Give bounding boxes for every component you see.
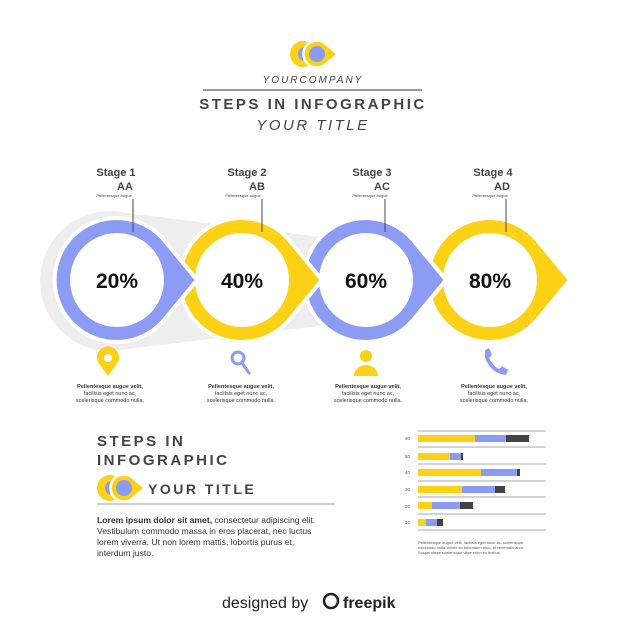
- stage descriptions: scelerisque commodo nulla.: [76, 398, 145, 404]
- icon: phone: [485, 348, 508, 375]
- stage labels: AC: [374, 181, 390, 193]
- paragraph: [97, 515, 315, 558]
- stage labels: AD: [494, 181, 510, 193]
- paragraph: lorem viverra. Ut non lorem mattis, lobortis purus et,: [97, 537, 294, 547]
- bar chart: [405, 431, 546, 530]
- stage labels: AA: [117, 181, 133, 193]
- stage descriptions: Pellentesque augue velit,: [335, 384, 401, 390]
- footer credit: freepik: [343, 595, 396, 612]
- stage 4: 80%: [469, 270, 511, 293]
- stage labels: AB: [249, 181, 265, 193]
- icon: pin: [97, 346, 119, 376]
- stage 2: [180, 218, 322, 342]
- bar chart: 60: [405, 436, 411, 441]
- bar chart: 50: [405, 454, 411, 459]
- bar chart: 20: [405, 504, 411, 509]
- stage 1: 20%: [96, 270, 138, 293]
- stage labels: Stage 3: [352, 167, 392, 179]
- stage descriptions: [76, 384, 529, 404]
- stage descriptions: scelerisque commodo nulla.: [207, 398, 276, 404]
- stage 3: 60%: [345, 270, 387, 293]
- chart caption: Suspendisse scelerisque vitae enim eu finibus.: [418, 550, 501, 555]
- paragraph: Lorem ipsum dolor sit amet, consectetur adipiscing elit.: [97, 515, 315, 525]
- logo: bottom: [97, 474, 145, 502]
- stage descriptions: facilisis eget nunc ac,: [84, 391, 137, 397]
- company name: YOURCOMPANY: [263, 75, 363, 86]
- stage labels: Stage 4: [473, 167, 513, 179]
- stage 2: 40%: [221, 270, 263, 293]
- paragraph: interdum justo.: [97, 548, 153, 558]
- stage labels: Pellentesque augue: [225, 193, 261, 198]
- title: STEPS IN INFOGRAPHIC: [199, 96, 427, 113]
- stage descriptions: facilisis eget nunc ac,: [468, 391, 521, 397]
- icon: user: [354, 350, 378, 376]
- chart caption: [418, 540, 524, 555]
- chart caption: commodo nulla. Morbi eu bibendum arcu, id venenatis arcu.: [418, 545, 524, 550]
- paragraph: Vestibulum commodo massa in eros placerat, nec luctus: [97, 526, 311, 536]
- bottom heading: [97, 433, 230, 469]
- stage descriptions: Pellentesque augue velit,: [461, 384, 527, 390]
- icon: search: [232, 352, 249, 373]
- footer credit: [222, 594, 396, 612]
- subtitle: YOUR TITLE: [256, 117, 370, 134]
- footer credit: designed by: [222, 595, 308, 612]
- stage labels: Pellentesque augue: [352, 193, 388, 198]
- shadow band: [40, 211, 385, 351]
- stage descriptions: facilisis eget nunc ac,: [215, 391, 268, 397]
- stage 3: [304, 218, 446, 342]
- bottom heading: INFOGRAPHIC: [97, 452, 230, 469]
- stage descriptions: facilisis eget nunc ac,: [342, 391, 395, 397]
- stage descriptions: scelerisque commodo nulla.: [334, 398, 403, 404]
- chart caption: Pellentesque augue velit, facilisis eget nunc ac, scelerisque: [418, 540, 524, 545]
- stage labels: [96, 167, 513, 232]
- stage descriptions: Pellentesque augue velit,: [77, 384, 143, 390]
- stage labels: Pellentesque augue: [472, 193, 508, 198]
- bottom heading: STEPS IN: [97, 433, 185, 450]
- stage labels: Pellentesque augue: [96, 193, 132, 198]
- bottom title: YOUR TITLE: [148, 481, 256, 497]
- stage descriptions: Pellentesque augue velit,: [208, 384, 274, 390]
- logo: top: [290, 40, 338, 68]
- stage 4: [428, 218, 570, 342]
- stage labels: Stage 1: [96, 167, 136, 179]
- stage labels: Stage 2: [227, 167, 267, 179]
- stage 1: [55, 218, 197, 342]
- bar chart: 10: [405, 520, 411, 525]
- bar chart: 40: [405, 470, 411, 475]
- bar chart: 30: [405, 487, 411, 492]
- stage descriptions: scelerisque commodo nulla.: [460, 398, 529, 404]
